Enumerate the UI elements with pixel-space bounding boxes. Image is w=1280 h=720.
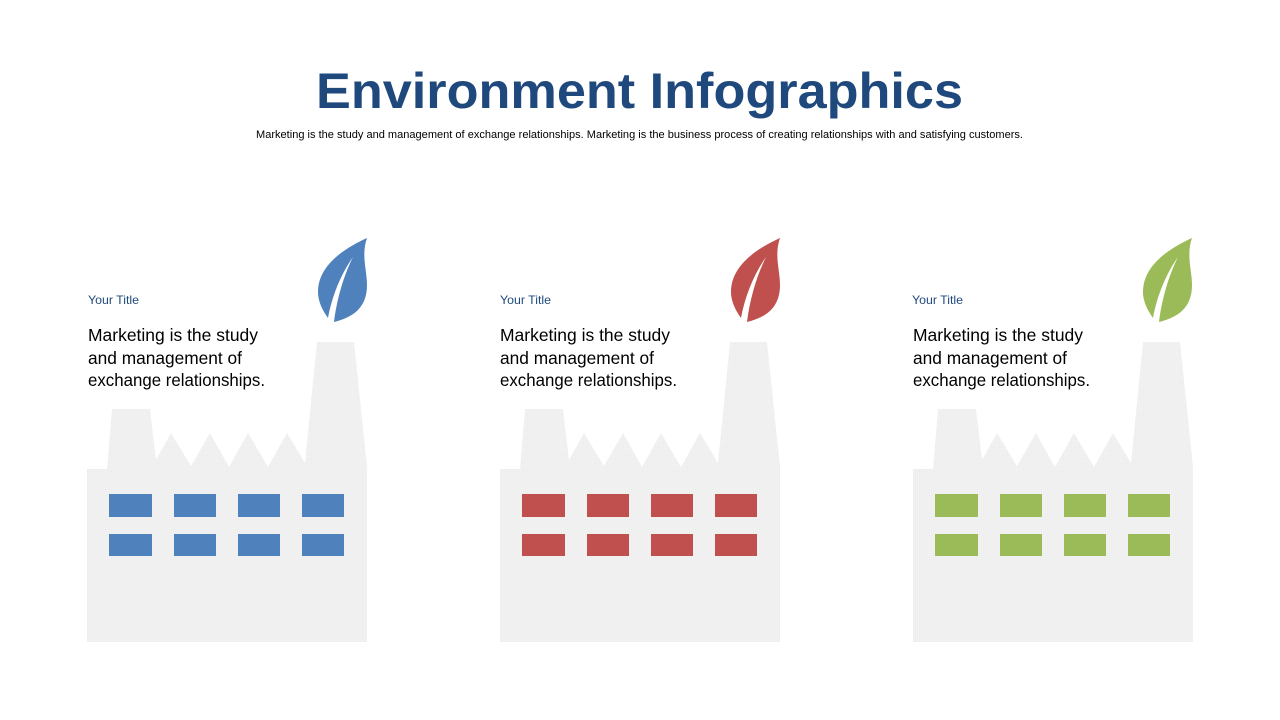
body text: and management of [913, 348, 1067, 368]
factory silhouette [87, 342, 367, 642]
leaf flame [731, 238, 780, 322]
body text: exchange relationships. [913, 370, 1090, 390]
body text: exchange relationships. [88, 370, 265, 390]
body text: and management of [500, 348, 654, 368]
leaf flame [1143, 238, 1192, 322]
body text [88, 325, 265, 390]
windows [109, 494, 344, 556]
heading: Your Title [912, 293, 963, 307]
body text [500, 325, 677, 390]
panel: red factory [500, 238, 780, 642]
heading: Your Title [500, 293, 551, 307]
body text [913, 325, 1090, 390]
subtitle: Marketing is the study and management of exchange relationships. Marketing is the business process of creating relationships with and satisfying customers. [256, 129, 1023, 141]
body text: and management of [88, 348, 242, 368]
leaf flame [318, 238, 367, 322]
factory silhouette [500, 342, 780, 642]
panel: green factory [912, 238, 1193, 642]
body text: Marketing is the study [913, 325, 1083, 345]
body text: exchange relationships. [500, 370, 677, 390]
windows [935, 494, 1170, 556]
heading: Your Title [88, 293, 139, 307]
factory silhouette [913, 342, 1193, 642]
panel: blue factory [87, 238, 367, 642]
windows [522, 494, 757, 556]
body text: Marketing is the study [500, 325, 670, 345]
title: Environment Infographics [316, 63, 963, 119]
body text: Marketing is the study [88, 325, 258, 345]
